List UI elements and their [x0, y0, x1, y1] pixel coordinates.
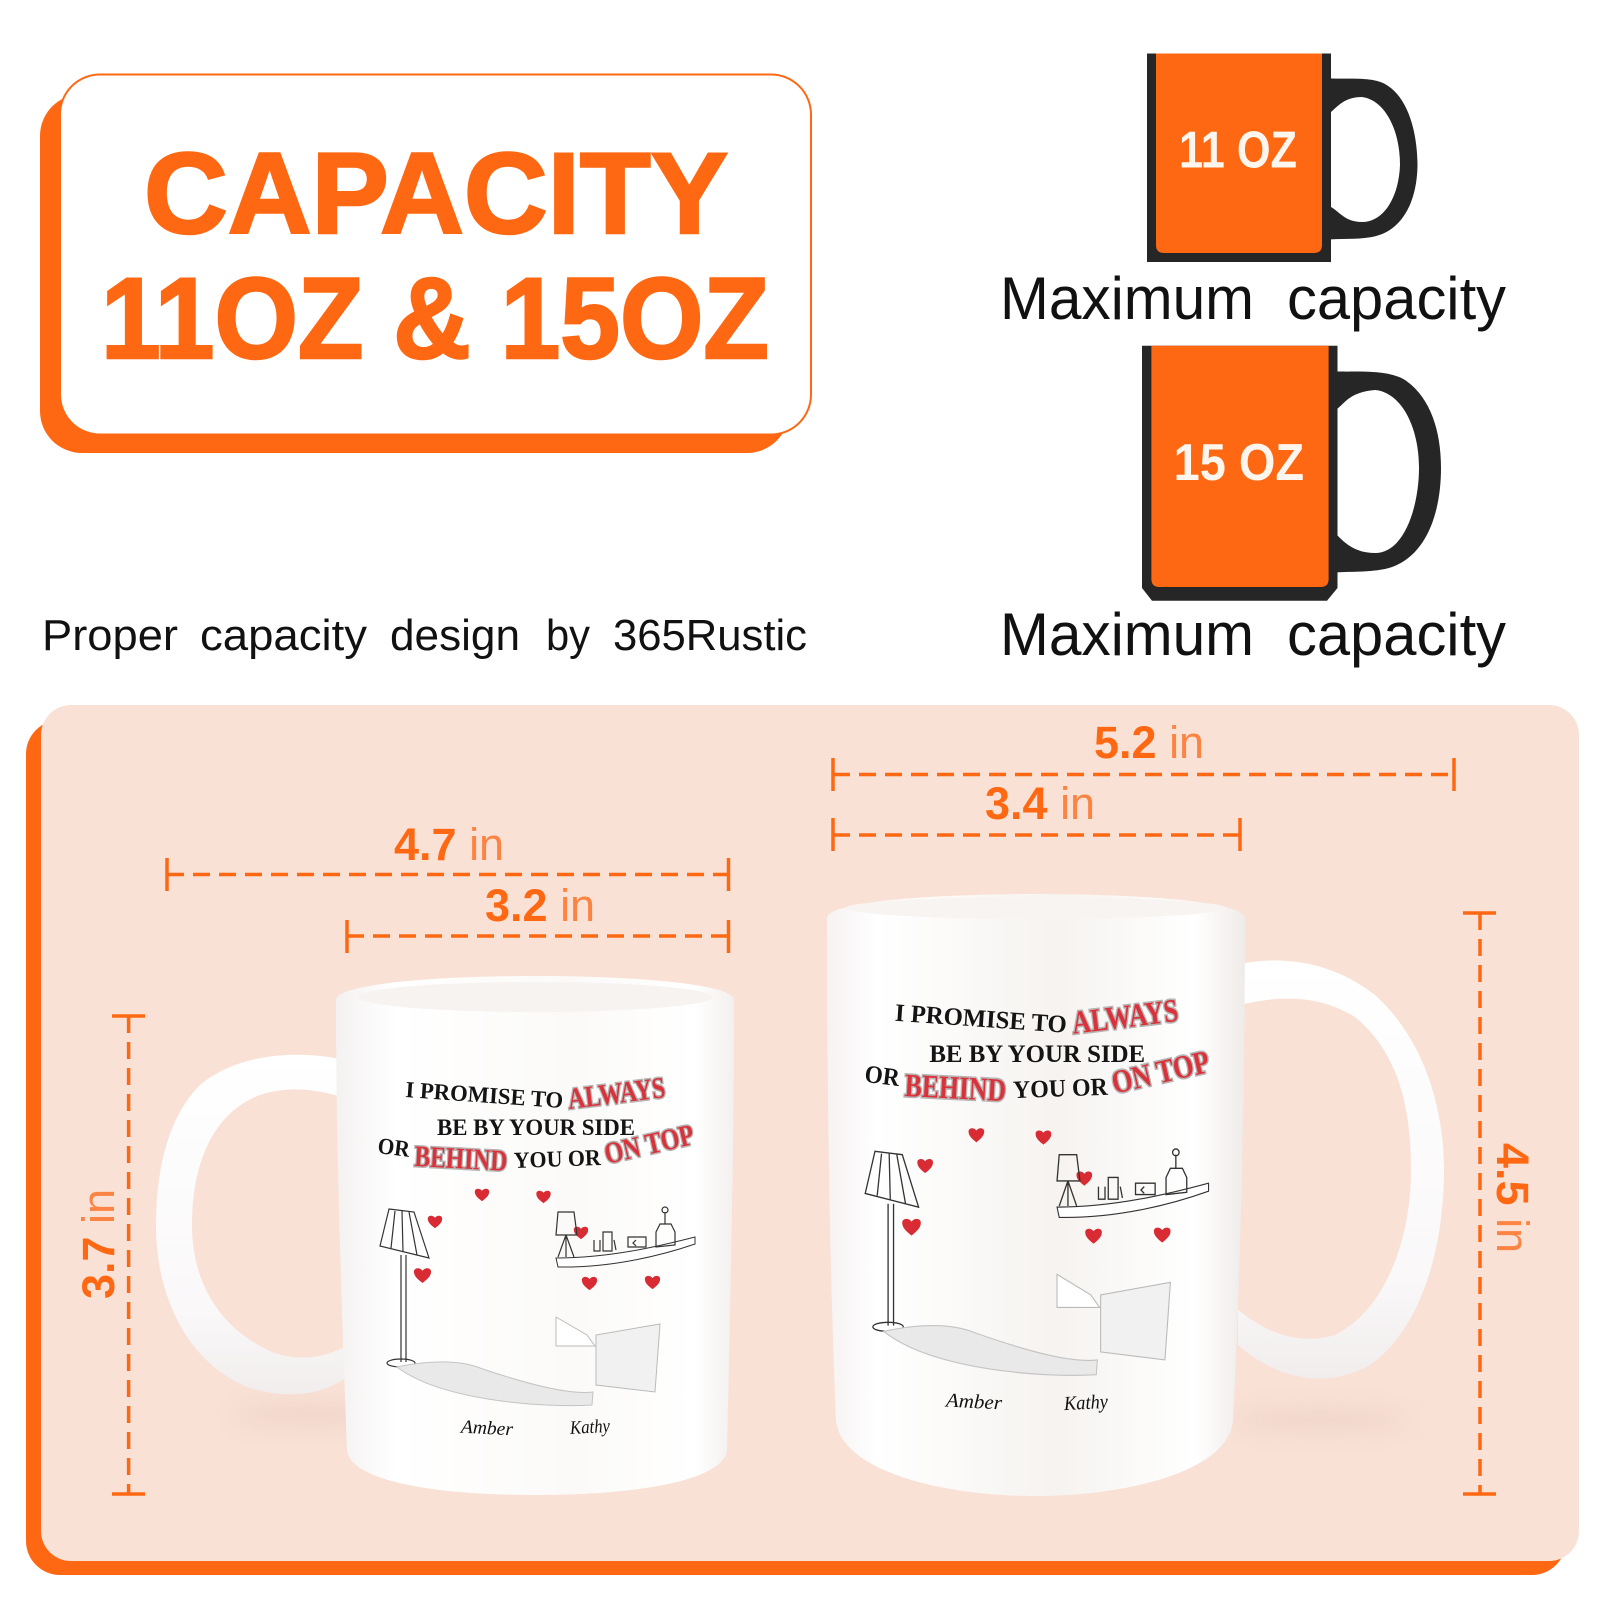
slogan: BE BY YOUR SIDE: [929, 1041, 1145, 1068]
dimension: 3.2 in width: 3.2 in: [485, 880, 595, 931]
dimension: 4.5 in height: [1463, 913, 1538, 1494]
caption: maximum capacity 15 oz: Maximum: [1000, 601, 1254, 668]
dimension: 4.7 in width: 4.7 in: [394, 819, 504, 870]
card face: [60, 74, 811, 434]
card shadow: [40, 94, 789, 453]
label: 15 oz: 15 OZ: [1174, 434, 1304, 492]
15 oz mug photo: [827, 894, 1444, 1496]
slogan: [376, 1071, 697, 1178]
slogan: OR: [863, 1061, 902, 1092]
slogan: YOU OR: [1013, 1074, 1109, 1104]
rim opening: [846, 897, 1226, 919]
slogan: BEHIND: [904, 1068, 1007, 1109]
body: [827, 894, 1245, 1496]
slogan: YOU OR: [513, 1145, 601, 1173]
caption: maximum capacity 11 oz: [1000, 265, 1506, 332]
11 oz mug photo: [156, 976, 734, 1495]
name: Kathy: Kathy: [569, 1416, 611, 1439]
name: Amber: Amber: [943, 1389, 1003, 1414]
handle: [156, 1055, 348, 1394]
caption: maximum capacity 11 oz: Maximum: [1000, 265, 1254, 332]
mug art: hearts, lamp, shelf, pillows: [380, 1189, 695, 1406]
slogan: I PROMISE TO: [894, 1000, 1068, 1039]
caption: maximum capacity 15 oz: capacity: [1287, 601, 1506, 668]
dimension: 3.7 in height: [73, 1016, 145, 1494]
heading line 1: CAPACITY: [144, 130, 728, 258]
slogan: BE BY YOUR SIDE: [437, 1115, 635, 1140]
handle: [1235, 960, 1444, 1379]
dimension: 4.7 in width: [167, 819, 728, 891]
dimension: 3.7 in height: 3.7 in: [73, 1189, 124, 1299]
name: Amber: Amber: [458, 1417, 514, 1440]
icon: 11 oz mug: [1147, 54, 1418, 262]
caption: proper capacity design: Proper: [42, 611, 178, 660]
slogan: ON TOP: [601, 1118, 697, 1171]
dimension: 5.2 in width: [833, 717, 1454, 791]
caption: maximum capacity 15 oz: [1000, 601, 1506, 668]
title card: [40, 74, 811, 453]
dimension: 3.4 in width: [833, 778, 1240, 851]
slogan: OR: [376, 1133, 412, 1162]
panel: mug dimensions: [26, 705, 1579, 1575]
slogan: BEHIND: [414, 1140, 508, 1178]
slogan: ALWAYS: [1070, 993, 1180, 1042]
panel background: [41, 705, 1579, 1561]
caption: maximum capacity 11 oz: capacity: [1287, 265, 1506, 332]
slogan: I PROMISE TO: [405, 1077, 564, 1113]
rim opening: [357, 982, 713, 1012]
dimension: 4.5 in height: 4.5 in: [1487, 1143, 1538, 1253]
heading line 2: 11OZ & 15OZ: [101, 255, 769, 383]
caption: proper capacity design: by: [546, 611, 590, 660]
name: Kathy: Kathy: [1062, 1391, 1109, 1415]
dimension: 3.4 in width: 3.4 in: [985, 778, 1095, 829]
caption: proper capacity design: 365Rustic: [613, 611, 807, 660]
mug shadows: [230, 1405, 1410, 1430]
body: [336, 976, 734, 1495]
slogan: [863, 993, 1213, 1109]
caption: proper capacity design: design: [390, 611, 520, 660]
icon: 15 oz mug: [1142, 346, 1441, 601]
label: 11 oz: 11 OZ: [1179, 122, 1297, 180]
dimension: 3.2 in width: [347, 880, 728, 953]
mug art: hearts, lamp, shelf, pillows: [865, 1128, 1209, 1375]
slogan: ALWAYS: [566, 1071, 667, 1116]
dimension: 5.2 in width: 5.2 in: [1094, 717, 1204, 768]
caption: proper capacity design: [42, 611, 807, 660]
panel shadow: [26, 720, 1566, 1575]
caption: proper capacity design: capacity: [200, 611, 367, 660]
slogan: ON TOP: [1108, 1044, 1213, 1102]
